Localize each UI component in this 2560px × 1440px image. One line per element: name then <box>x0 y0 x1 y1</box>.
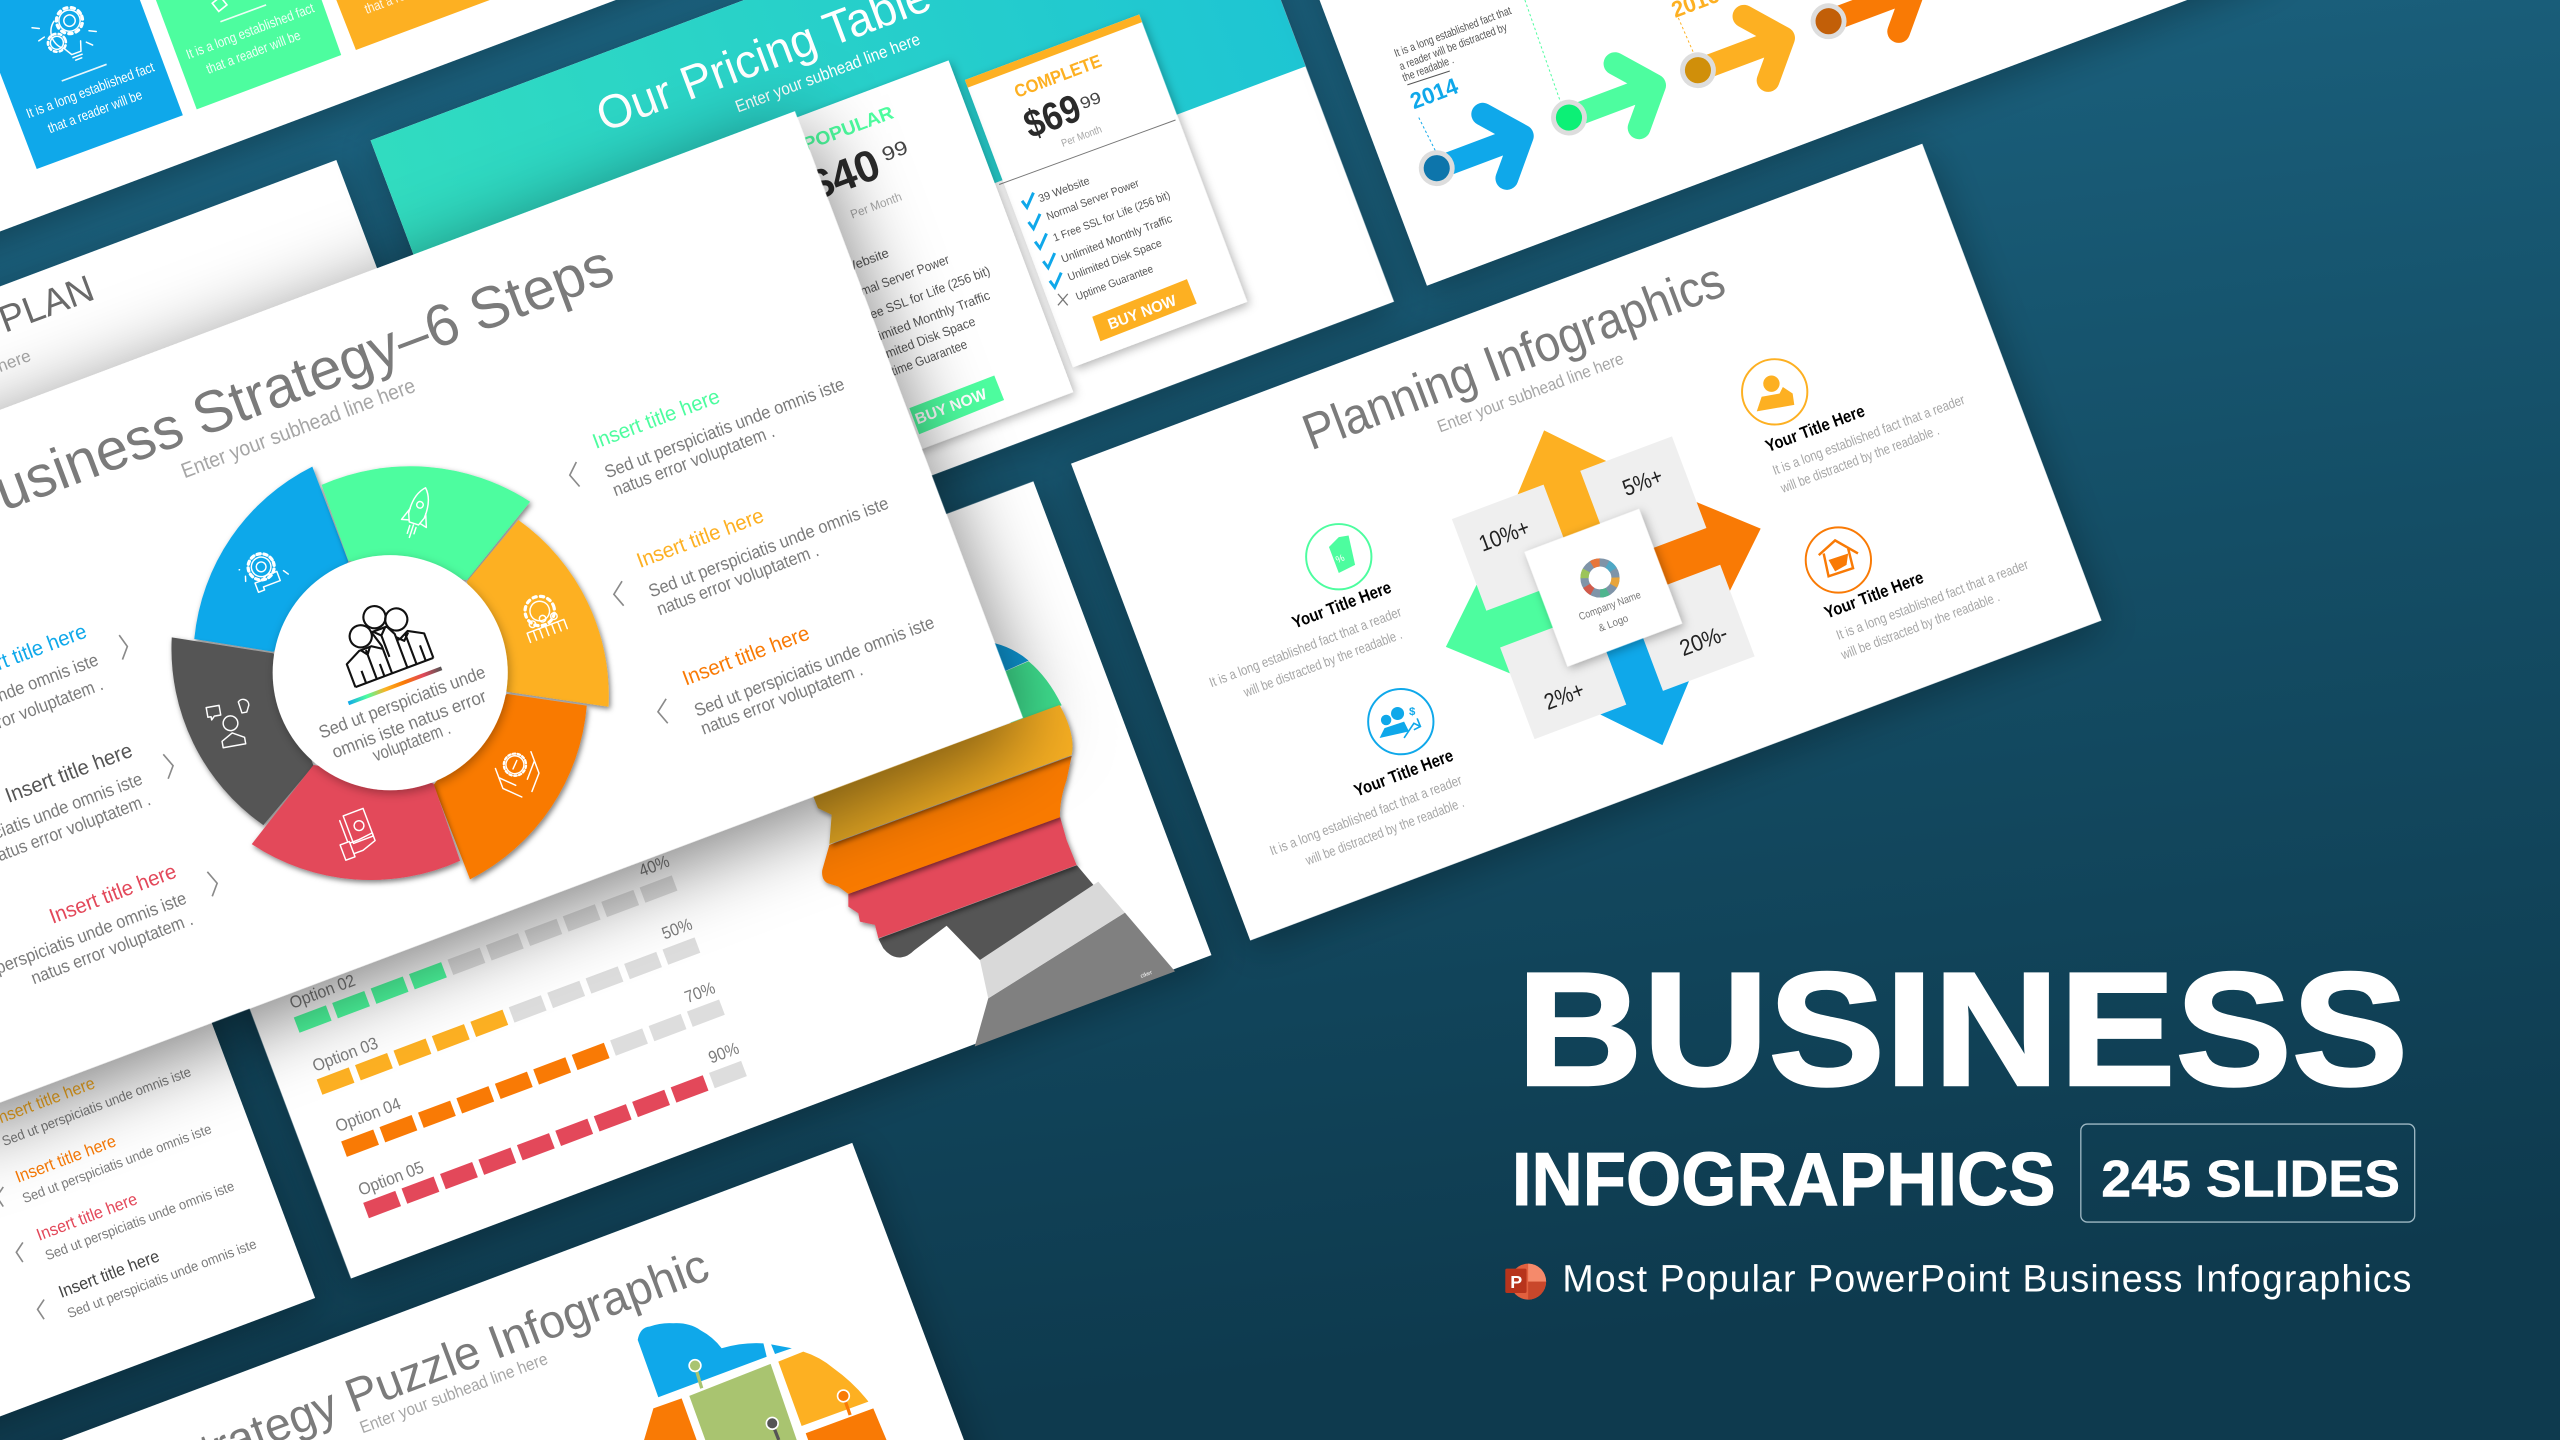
arrow: right <box>1643 484 1777 611</box>
panel: list slide: Sed ut perspiciatis unde omnis iste <box>65 1235 259 1321</box>
item: yellow person: will be distracted by the readable . <box>1778 422 1941 496</box>
card: complete plan: 1 Free SSL for Life (256 bit) <box>1052 190 1172 244</box>
item: green tag: It is a long established fact that a reader <box>1207 603 1404 690</box>
text block: step green: natus error voluptatem . <box>610 421 777 500</box>
panel: list slide <box>0 820 315 1440</box>
badge: 245 slides <box>2081 1124 2415 1222</box>
icon: tile green <box>212 0 227 11</box>
text block: step orange: Insert title here <box>679 622 813 690</box>
card: complete plan: Uptime Guarantee <box>1074 263 1155 303</box>
icon: idea gears <box>30 1 103 71</box>
center disc <box>273 555 508 790</box>
item: green tag: will be distracted by the readable . <box>1240 626 1404 700</box>
item: green tag: % <box>1334 553 1347 566</box>
bar row: option 04 <box>341 999 725 1157</box>
icon: hands percent <box>493 747 545 802</box>
text block: step orange: natus error voluptatem . <box>698 659 866 738</box>
subheading: pricing: Enter your subhead line here <box>732 29 923 116</box>
panel: list slide: Sed ut perspiciatis unde omnis iste <box>20 1120 214 1206</box>
diagram labels: 20%- <box>1676 619 1731 661</box>
card: complete plan: Unlimited Monthly Traffic <box>1060 213 1174 266</box>
text block: step green: Insert title here <box>590 385 723 454</box>
card: complete plan: COMPLETE <box>1012 51 1104 102</box>
item: green tag <box>1207 524 1404 700</box>
center text: Sed ut perspiciatis unde <box>316 662 488 743</box>
item: orange house <box>1806 527 2031 663</box>
card: complete plan: 99 <box>1078 89 1104 113</box>
card: popular plan: 39 Website <box>825 245 891 282</box>
item: yellow person <box>1742 359 1967 496</box>
company label: Company Name <box>1577 589 1643 623</box>
icon: powerpoint <box>1505 1264 1546 1300</box>
panel: list slide: Insert title here <box>34 1189 140 1245</box>
text block: step yellow <box>614 493 891 619</box>
bar row: option 05 <box>363 1061 747 1218</box>
title: infographics: INFOGRAPHICS <box>1512 1137 2056 1221</box>
subheading: business strategy: Enter your subhead line here <box>178 374 419 483</box>
item: blue people: will be distracted by the readable . <box>1302 794 1466 868</box>
arrow: left <box>1429 565 1563 691</box>
arrow: 2015 <box>1540 53 1667 156</box>
item: green tag: Your Title Here <box>1289 577 1394 632</box>
panel: timeline slide: a reader will be distracted by <box>1398 21 1509 73</box>
chart: option bars: 50% <box>659 914 695 943</box>
text block: step green <box>570 374 847 500</box>
chart: option bars: Option 02 <box>287 970 358 1013</box>
chart: option bars: 70% <box>682 977 718 1007</box>
card: popular plan: Normal Server Power <box>841 251 952 305</box>
illustration: puzzle <box>638 1323 887 1440</box>
item: blue people: Your Title Here <box>1351 745 1456 800</box>
center text <box>316 662 489 765</box>
panel: list slide: Sed ut perspiciatis unde omnis iste <box>0 1063 193 1149</box>
icon: powerpoint: P <box>1510 1272 1522 1292</box>
card: popular plan: BUY NOW <box>913 386 990 428</box>
text block: step red: natus error voluptatem . <box>28 909 196 988</box>
panel: list slide: Insert title here <box>56 1246 162 1302</box>
card: complete plan: Normal Server Power <box>1045 177 1141 223</box>
item: orange house: Your Title Here <box>1821 567 1926 623</box>
card: popular plan: Unlimited Monthly Traffic <box>858 287 992 350</box>
panel: puzzle slide <box>1 1143 1032 1440</box>
panel: list slide: Sed ut perspiciatis unde omnis iste <box>43 1177 237 1263</box>
arrow: 2014 <box>1408 104 1534 207</box>
text block: step yellow: natus error voluptatem . <box>654 540 821 619</box>
center text: voluptatem . <box>370 718 453 765</box>
text block: step orange <box>658 612 937 738</box>
subtitle: Most Popular PowerPoint Business Infographics <box>1562 1257 2411 1299</box>
panel: plan slide <box>0 160 516 958</box>
diagram: four arrows <box>1387 371 1820 804</box>
card: popular plan: $40 <box>801 140 887 212</box>
icon: presenter <box>206 698 255 749</box>
chart: option bars: Option 04 <box>332 1093 404 1136</box>
card: popular plan: 99 <box>879 137 911 166</box>
arrow: up <box>1500 414 1626 548</box>
card: complete plan: Unlimited Disk Space <box>1066 237 1164 284</box>
panel: bars and head slide <box>173 481 1211 1279</box>
subheading: planning: Enter your subhead line here <box>1434 348 1626 436</box>
diagram labels: 10%+ <box>1475 514 1533 557</box>
card: complete plan: BUY NOW <box>1106 292 1179 334</box>
panel: timeline slide: the readable . <box>1401 54 1456 84</box>
illustration: layered head: ciker <box>1140 970 1153 980</box>
company label <box>1577 589 1643 635</box>
item: orange house: It is a long established fact that a reader <box>1834 556 2031 643</box>
icon: company logo ring <box>1584 562 1616 593</box>
icon: team <box>331 592 433 687</box>
card: popular plan: Per Month <box>848 189 904 222</box>
chart: six step wheel <box>171 466 609 880</box>
text block: step red: Insert title here <box>46 860 180 929</box>
chart: option bars: 40% <box>636 851 672 880</box>
panel: planning slide <box>1071 144 2101 940</box>
panel: list slide: Insert title here <box>12 1131 119 1187</box>
badge: 245 slides: 245 SLIDES <box>2101 1151 2400 1209</box>
card: popular plan <box>704 60 1073 484</box>
item: blue people <box>1267 689 1466 868</box>
arrow: 2016 <box>1669 6 1796 109</box>
chart: option bars: Option 05 <box>355 1157 426 1200</box>
colour bar <box>348 666 442 705</box>
title: business: BUSINESS <box>1517 940 2408 1120</box>
icon: rocket <box>397 484 438 541</box>
item: yellow person: Your Title Here <box>1763 401 1867 456</box>
text block: step gray: Insert title here <box>2 739 136 808</box>
card: popular plan: 1 Free SSL for Life (256 bit) <box>848 263 992 329</box>
company label: & Logo <box>1597 612 1630 635</box>
center text: omnis iste natus error <box>329 686 489 762</box>
panel: timeline slide <box>1247 0 2278 286</box>
arrow: down <box>1580 628 1707 762</box>
item: yellow person: It is a long established fact that a reader <box>1770 391 1967 478</box>
item: blue people: It is a long established fact that a reader <box>1267 771 1464 858</box>
chart: option bars: 90% <box>706 1038 742 1067</box>
subheading: puzzle: Enter your subhead line here <box>357 1348 550 1437</box>
item: blue people: $ <box>1409 706 1416 718</box>
bar row: option 03 <box>317 937 700 1095</box>
icon: gear team <box>516 590 567 642</box>
panel: feature tiles slide: It is a long established fact <box>24 58 156 121</box>
panel: timeline slide: 2014 <box>1406 72 1462 114</box>
icon: search gear <box>236 547 291 596</box>
card: popular plan: POPULAR <box>800 101 897 155</box>
chart: option bars: Option 03 <box>309 1033 381 1076</box>
chart: option bars <box>287 851 747 1218</box>
panel: feature tiles slide: that a reader will be <box>204 27 303 77</box>
diagram labels: 2%+ <box>1540 676 1588 715</box>
item: orange house: will be distracted by the readable . <box>1838 588 2002 663</box>
card: complete plan: $69 <box>1018 87 1087 147</box>
text block: step green: Sed ut perspiciatis unde omnis iste <box>602 374 847 482</box>
panel: pricing slide <box>371 0 1394 619</box>
card: complete plan: Per Month <box>1060 124 1104 150</box>
diagram labels: 5%+ <box>1619 462 1666 501</box>
card: complete plan: 39 Website <box>1037 175 1091 205</box>
panel: feature tiles slide: that a reader will be <box>45 86 144 136</box>
panel: feature tiles slide <box>0 0 776 260</box>
text block: step yellow: Insert title here <box>634 504 767 573</box>
heading: planning: Planning Infographics <box>1295 251 1732 461</box>
icon: hand money <box>331 808 378 860</box>
illustration: layered head <box>813 637 1175 1047</box>
panel: business strategy slide <box>0 111 1023 1123</box>
text block: step yellow: Sed ut perspiciatis unde omnis iste <box>646 493 891 601</box>
card: popular plan: Uptime Guarantee <box>875 337 969 384</box>
center card <box>1524 509 1682 667</box>
text block: step orange: Sed ut perspiciatis unde omnis iste <box>692 612 937 720</box>
card: complete plan <box>965 15 1247 367</box>
arrow: 2017 <box>1800 0 1926 60</box>
card: popular plan: Unlimited Disk Space <box>864 314 977 368</box>
diagram labels <box>1475 462 1731 715</box>
bar row: option 02 <box>294 875 677 1033</box>
